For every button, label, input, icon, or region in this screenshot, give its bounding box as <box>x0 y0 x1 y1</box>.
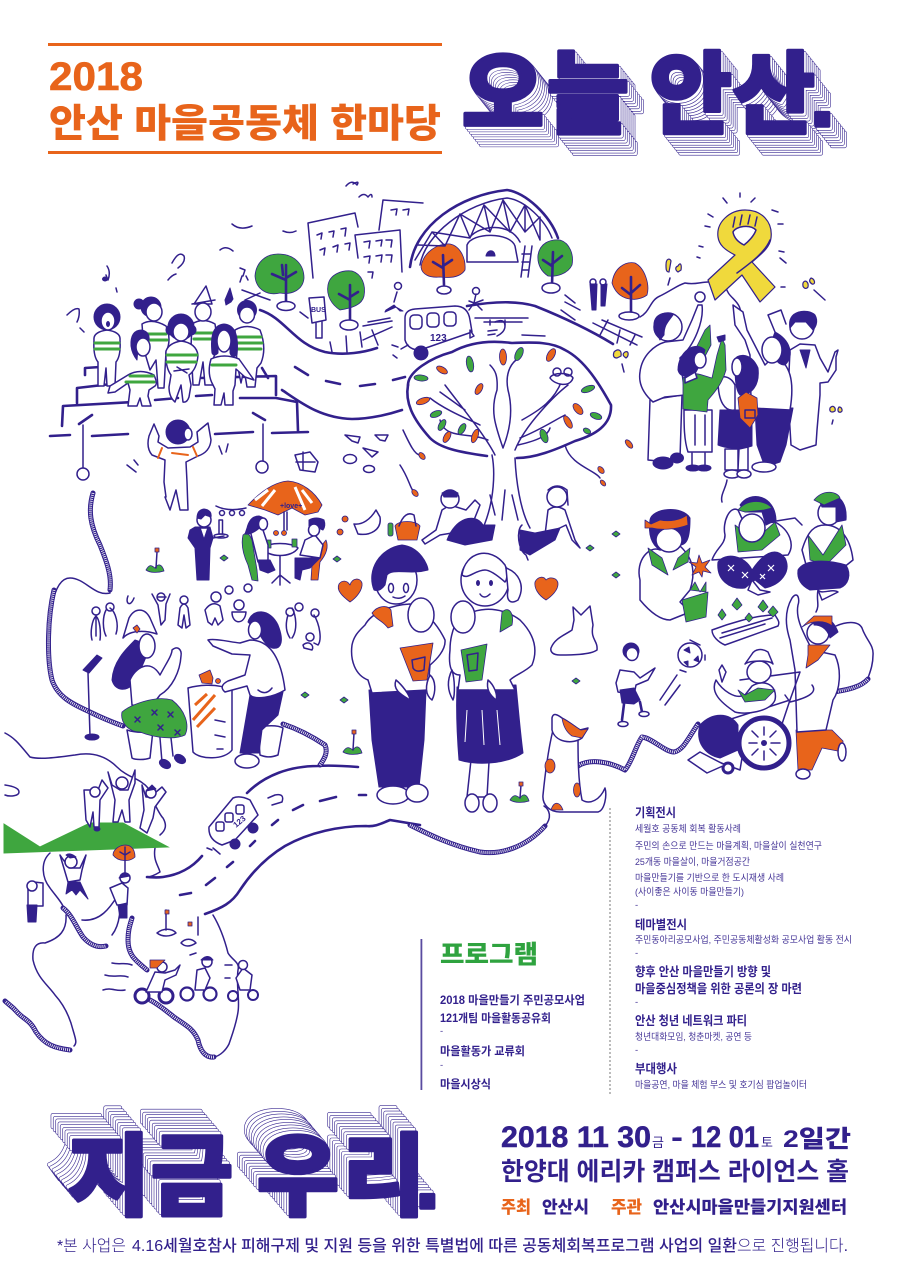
heart <box>535 577 558 600</box>
title: 오늘 안산 extruded lettering: 오늘 안산. <box>16 65 851 165</box>
legs and shoes <box>160 738 173 762</box>
exhibition and events list: 청년대화모임, 청춘마켓, 공연 등 <box>635 1031 752 1043</box>
torso and arms <box>449 609 535 690</box>
hill with cheering people <box>4 770 168 922</box>
singer woman with green skirt <box>83 610 187 770</box>
singer: ponytail <box>134 297 169 388</box>
program list: 마을시상식 <box>440 1078 491 1091</box>
orange tree <box>113 845 135 861</box>
cafe umbrella scene: +love+ <box>280 503 302 510</box>
exhibition and events list: 주민동아리공모사업, 주민공동체활성화 공모사업 활동 전시 <box>635 934 852 946</box>
organizers: 주최 <box>501 1198 531 1217</box>
program list: - <box>440 1060 443 1071</box>
torso and arms <box>352 604 445 693</box>
title: 오늘 안산 extruded lettering: 오늘 안산. <box>12 60 847 160</box>
program list <box>440 993 585 1091</box>
cafe umbrella scene <box>188 481 327 585</box>
person in navy trousers <box>733 305 793 472</box>
family: father with baby <box>338 545 445 804</box>
walkers and street details: BUS <box>311 307 326 314</box>
seated guest: woman <box>242 533 258 581</box>
lying cat <box>551 606 597 655</box>
torso and arm <box>130 648 181 708</box>
title: 지금 우리 extruded lettering: 지금 우리. <box>0 1124 437 1224</box>
title: 오늘 안산 extruded lettering: 오늘 안산. <box>14 62 849 162</box>
title: 오늘 안산 extruded lettering: 오늘 안산. <box>4 50 839 150</box>
skirt <box>457 685 523 763</box>
choir on stairs <box>50 286 308 436</box>
bandstand dome <box>410 190 558 277</box>
shoe <box>235 754 259 768</box>
date: 12 01 <box>691 1121 759 1154</box>
hat <box>123 610 157 638</box>
heading: event title with orange rules <box>48 43 442 154</box>
runner <box>385 305 403 312</box>
title: 오늘 안산 extruded lettering: 오늘 안산. <box>8 55 843 155</box>
small distant figures <box>225 288 233 305</box>
title: 지금 우리 extruded lettering: 지금 우리. <box>0 1121 435 1221</box>
program list: 121개팀 마을활동공유회 <box>440 1011 551 1025</box>
singer: left curly hair <box>94 304 120 386</box>
shoes <box>377 786 409 804</box>
program heading: 프로그램 <box>440 941 538 969</box>
jumping boy <box>60 855 86 882</box>
organizers <box>501 1198 847 1217</box>
program panel <box>420 939 585 1091</box>
title: 오늘 안산 extruded lettering: 오늘 안산. <box>2 48 837 148</box>
heading: event title with orange rules: 안산 마을공동체 한마당 <box>49 103 441 146</box>
vendor woman <box>208 612 285 768</box>
falling leaves <box>400 430 600 492</box>
rope climber right <box>110 883 128 905</box>
seated guest: man <box>310 540 327 580</box>
title: 오늘 안산 extruded lettering: 오늘 안산. <box>6 52 841 152</box>
title: 지금 우리 extruded lettering: 지금 우리. <box>0 1116 430 1216</box>
legs <box>467 760 489 797</box>
cyclist 3 <box>228 960 258 1001</box>
heading: event title with orange rules: 2018 <box>49 55 143 99</box>
hair <box>112 640 150 689</box>
bus stop sign <box>309 297 326 323</box>
program list: 2018 마을만들기 주민공모사업 <box>440 993 585 1007</box>
singer: pointed hat <box>191 286 217 385</box>
organizers: 안산시 <box>542 1198 589 1217</box>
exhibition and events list: - <box>635 1045 638 1056</box>
title: 오늘 안산 extruded lettering: 오늘 안산. <box>4 50 839 150</box>
butterflies <box>613 259 842 424</box>
program list: - <box>440 1026 443 1037</box>
boy and soccer ball <box>616 640 705 726</box>
seated man <box>699 715 738 758</box>
sitting couple under tree <box>422 486 580 560</box>
program list: 마을활동가 교류회 <box>440 1044 525 1058</box>
exhibition and events list: - <box>635 997 638 1008</box>
exhibition and events list: 마을중심정책을 위한 공론의 장 마련 <box>635 981 802 996</box>
couple walking <box>590 284 607 310</box>
head <box>375 556 417 604</box>
rope climber left <box>28 882 43 906</box>
trees along upper road <box>255 240 648 330</box>
gardener with headband and pot <box>639 510 711 622</box>
date <box>501 1121 851 1154</box>
wheelchair frame <box>700 672 800 770</box>
singer: centre <box>166 314 198 402</box>
bus: lower road <box>207 795 283 854</box>
sitting woman <box>545 507 580 548</box>
caregiver legs <box>796 730 843 770</box>
singer: pointing <box>108 330 156 406</box>
big central tree <box>400 342 634 528</box>
cheering person left <box>84 780 108 827</box>
city buildings <box>308 200 423 278</box>
date: 2018 11 30 <box>501 1121 651 1154</box>
title: 오늘 안산 extruded lettering: 오늘 안산. <box>10 58 845 158</box>
head <box>461 554 509 606</box>
stairs <box>50 367 308 436</box>
title: 오늘 안산 extruded lettering: 오늘 안산. <box>0 45 835 145</box>
torso with arms <box>208 639 285 698</box>
gardener with flowered trousers <box>712 497 791 595</box>
cyclist 2 <box>180 956 216 1000</box>
doves, stones and squirrels <box>295 435 388 472</box>
bus: lower road: 123 <box>232 814 248 830</box>
title: 오늘 안산 extruded lettering: 오늘 안산. <box>10 58 845 158</box>
date: - <box>671 1121 683 1154</box>
small wheel and footrest <box>723 763 733 773</box>
exhibition and events list: 테마별전시 <box>635 918 687 932</box>
bird nest <box>550 374 573 384</box>
footer note: 4.16세월호참사 피해구제 및 지원 등을 위한 특별법에 따른 공동체회복프로그램 사업의 일환 <box>132 1237 737 1255</box>
man with backpack straps <box>640 292 705 469</box>
exhibition and events list: - <box>635 900 638 911</box>
cheering person right <box>140 785 166 833</box>
big wheel <box>739 718 789 768</box>
exhibition and events list: 마을공연, 마을 체험 부스 및 호기심 팝업놀이터 <box>635 1079 807 1091</box>
head <box>248 612 281 648</box>
title: 오늘 안산 extruded lettering: 오늘 안산. <box>6 52 841 152</box>
baby <box>408 598 434 632</box>
brick path <box>330 295 642 352</box>
event date and venue <box>501 1121 851 1217</box>
waiter <box>188 527 213 580</box>
scarf <box>806 645 830 668</box>
wheelchair man and caregiver <box>688 595 846 779</box>
picnic basket and cat <box>337 510 420 540</box>
illustration: village map <box>4 182 873 1057</box>
cat and dog <box>543 606 606 812</box>
title: 지금 우리 extruded lettering: 지금 우리. <box>0 1119 433 1219</box>
footer note: 으로 진행됩니다. <box>737 1237 848 1255</box>
leaves <box>414 346 603 444</box>
exhibition and events list: 세월호 공동체 회복 활동사례 <box>635 823 741 835</box>
woman in green top <box>678 325 726 471</box>
exhibition and events list <box>610 805 852 1095</box>
exhibition and events list: 주민의 손으로 만드는 마을계획, 마을살이 실천연구 <box>635 840 822 852</box>
title: 지금 우리 extruded lettering: 지금 우리. <box>0 1127 440 1227</box>
cyclist 1 with orange hair <box>135 960 180 1003</box>
exhibition and events list: 부대행사 <box>635 1061 677 1076</box>
footer note: *본 사업은 <box>57 1237 126 1255</box>
map outline: roads and river <box>5 282 873 1057</box>
orange tree 5 <box>612 263 648 320</box>
cheering person middle <box>108 770 135 822</box>
title: 지금 우리 extruded lettering: 지금 우리. <box>0 1124 437 1224</box>
exhibition and events list: - <box>635 948 638 959</box>
exhibition and events list: 향후 안산 마을만들기 방향 및 <box>635 964 771 979</box>
sitting dog <box>543 730 606 812</box>
title: 지금 우리 extruded lettering: 지금 우리. <box>0 1119 433 1219</box>
head and hat <box>807 622 829 644</box>
cafe table <box>262 544 298 556</box>
birds and music notes <box>67 182 372 332</box>
title: 지금 우리 extruded lettering: 지금 우리. <box>0 1113 428 1213</box>
exhibition and events list: (사이좋은 사이동 마을만들기) <box>635 887 744 898</box>
date: 토 <box>761 1135 773 1150</box>
green tree 1 <box>255 254 304 310</box>
organizers: 안산시마을만들기지원센터 <box>653 1198 847 1217</box>
organizers: 주관 <box>611 1198 642 1217</box>
singer: long hair right <box>209 324 254 405</box>
title: 지금 우리 extruded lettering: 지금 우리. <box>0 1116 430 1216</box>
exhibition and events list: 마을만들기를 기반으로 한 도시재생 사례 <box>635 873 784 884</box>
gardeners <box>639 492 853 645</box>
yellow ribbon group <box>640 193 838 478</box>
exhibition and events list: 기획전시 <box>635 805 676 820</box>
venue: 한양대 에리카 캠퍼스 라이언스 홀 <box>501 1158 849 1186</box>
green hill <box>4 823 168 853</box>
date: 2일간 <box>783 1126 851 1153</box>
microphone <box>83 655 102 673</box>
title: 오늘 안산 extruded lettering: 오늘 안산. <box>14 62 849 162</box>
date: 금 <box>652 1135 664 1150</box>
table with gift box <box>188 670 232 758</box>
trousers <box>369 690 426 787</box>
planter with seedlings <box>712 598 779 645</box>
cyclists <box>103 910 258 1003</box>
bucket stool <box>258 726 283 757</box>
title: 오늘 안산 extruded lettering: 오늘 안산. <box>8 55 843 155</box>
title: 지금 우리 extruded lettering: 지금 우리. <box>0 1121 435 1221</box>
title: 오늘 안산 extruded lettering: 오늘 안산. <box>16 65 851 165</box>
title: 오늘 안산 extruded lettering: 오늘 안산. <box>2 48 837 148</box>
title: 오늘 안산 extruded lettering: 오늘 안산. <box>12 60 847 160</box>
baby carrier <box>461 644 487 682</box>
hearts <box>338 579 362 602</box>
yellow ribbon <box>697 193 786 302</box>
exhibition and events list: 25개동 마을살이, 마을거점공간 <box>635 856 750 868</box>
man in grey suit on right <box>768 310 838 450</box>
navy trousers <box>240 692 283 753</box>
baby carrier <box>400 643 433 681</box>
orange tree 3 <box>421 244 465 294</box>
green tree 2 <box>328 271 364 330</box>
bus: upper road: 123 <box>430 333 447 344</box>
bucket stool <box>127 730 153 760</box>
sitting man <box>422 500 480 544</box>
bus: upper road <box>392 306 505 360</box>
walker <box>469 294 483 310</box>
exhibition and events list: 안산 청년 네트워크 파티 <box>635 1013 747 1028</box>
crowd outlines <box>91 584 320 650</box>
flowers and sprouts <box>146 531 620 802</box>
green tree 4 <box>538 240 572 293</box>
singer: right back <box>235 300 264 387</box>
string lights <box>216 506 246 510</box>
family: mother with baby <box>448 553 558 812</box>
gardener on right <box>770 492 853 600</box>
baby <box>451 601 475 633</box>
girl with orange backpack <box>718 355 758 478</box>
caregiver coat and arm <box>786 595 839 732</box>
title: 지금 우리 extruded lettering: 지금 우리. <box>0 1113 428 1213</box>
umbrella <box>248 481 322 515</box>
walkers and street details <box>225 268 642 352</box>
conductor and stage microphones <box>77 413 268 510</box>
green skirt <box>122 699 187 738</box>
